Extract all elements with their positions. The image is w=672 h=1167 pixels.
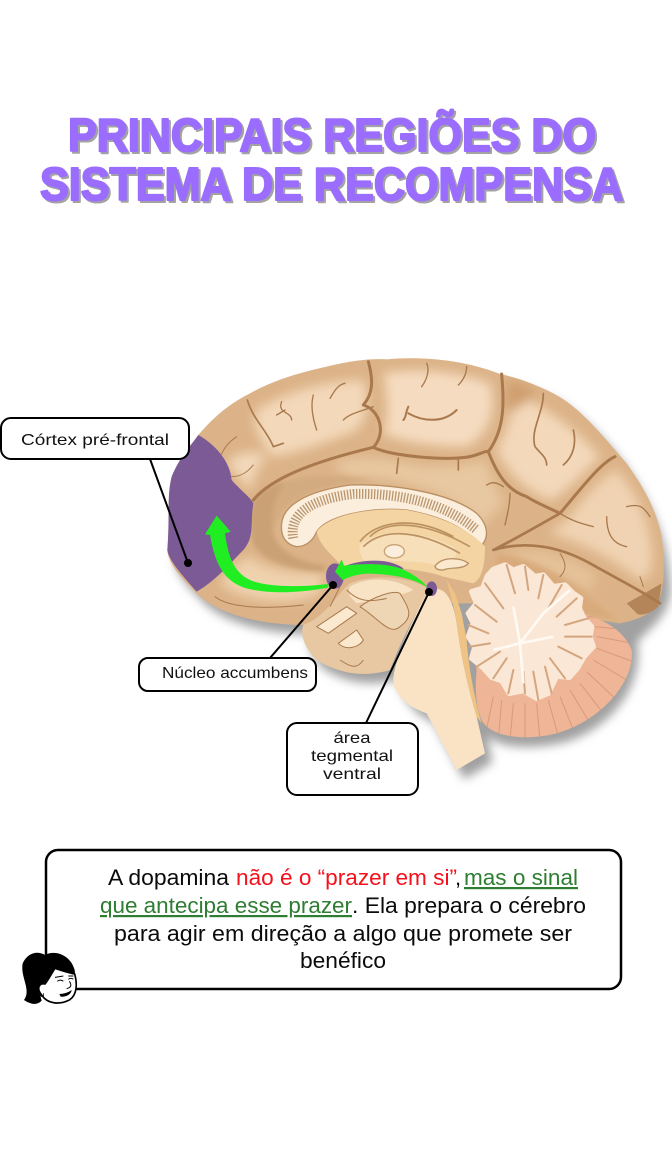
nucleus accumbens and VTA regions (326, 561, 437, 596)
callout text: A dopamina (108, 865, 230, 890)
callout text: que antecipa esse prazer (100, 893, 352, 918)
callout text: mas o sinal (464, 865, 578, 890)
label: área tegmental ventral: ventral (323, 766, 381, 783)
label: área tegmental ventral: área (334, 730, 371, 747)
corpus callosum (281, 485, 486, 547)
cerebellum (476, 609, 633, 742)
callout text: não é o “prazer em si” (236, 865, 457, 890)
label: núcleo accumbens: Núcleo accumbens (162, 665, 308, 682)
callout text: para agir em direção a algo que promete ser (114, 921, 572, 946)
occipital lower bands (493, 554, 620, 622)
callout text: benéfico (300, 948, 386, 973)
brainstem (393, 589, 485, 770)
brain illustration (167, 358, 671, 779)
cortical sulci (215, 362, 660, 607)
label: área tegmental ventral: tegmental (311, 748, 393, 765)
prefrontal cortex region (167, 435, 253, 592)
hypothalamus and temporal base (302, 578, 430, 674)
label: córtex pré-frontal (1, 418, 192, 567)
title (40, 109, 625, 212)
callout (46, 850, 621, 989)
thalamus and fornix (317, 509, 485, 583)
title: SISTEMA DE RECOMPENSA (40, 158, 623, 210)
title: PRINCIPAIS REGIÕES DO (70, 111, 598, 163)
optic structures (317, 583, 409, 666)
cortex (167, 358, 664, 625)
dark band around the callosum (251, 476, 373, 572)
brain shadow (175, 368, 671, 779)
title: SISTEMA DE RECOMPENSA (42, 160, 625, 212)
label: área tegmental ventral (287, 588, 433, 795)
cerebellar white matter (468, 565, 593, 700)
green arrow: to prefrontal cortex (205, 516, 328, 592)
label: córtex pré-frontal: Córtex pré-frontal (21, 432, 169, 449)
icon: woman's face (22, 953, 76, 1004)
callout text: . Ela prepara o cérebro (352, 893, 586, 918)
callout text: , (455, 865, 461, 890)
title: PRINCIPAIS REGIÕES DO (68, 109, 596, 161)
callout text (100, 865, 586, 973)
green arrow: to nucleus accumbens (335, 559, 428, 588)
label: núcleo accumbens (139, 581, 337, 691)
soft lighter gyri (220, 371, 652, 601)
